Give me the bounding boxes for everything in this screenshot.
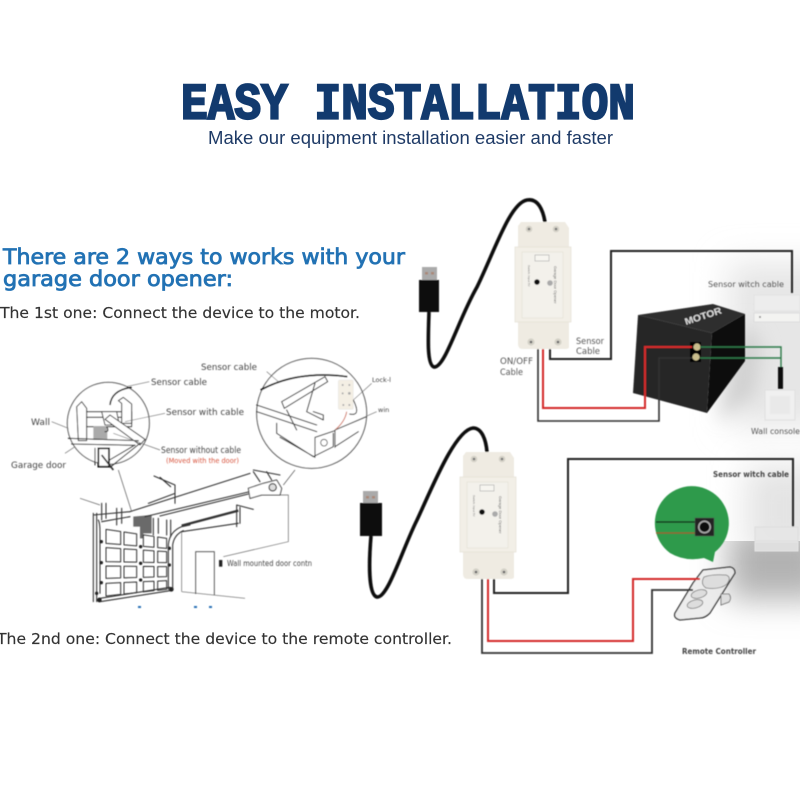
center mechanism — [133, 515, 152, 538]
intro heading: garage door opener: — [3, 267, 233, 291]
device 1: Switch: Input 5V — [527, 265, 531, 287]
intro heading — [2, 245, 405, 291]
door sensor 2 — [755, 527, 798, 551]
USB plug 2 — [360, 491, 382, 536]
labels 2: Remote Controller — [682, 647, 756, 656]
on/off red cable 1 — [543, 347, 692, 408]
device 2: Garage Door Opener — [498, 496, 503, 534]
USB cable 1 — [428, 200, 545, 367]
device 2: Switch: Input 5V — [472, 495, 476, 517]
circle: opener detail — [257, 358, 367, 468]
green wires to wall console — [700, 347, 781, 367]
garage labels — [11, 363, 391, 568]
motor — [633, 304, 745, 413]
cable labels 1 — [500, 280, 800, 436]
grey backdrop: motor wiring — [728, 262, 800, 427]
garage labels: Sensor cable — [151, 378, 207, 388]
device 1 — [515, 222, 571, 349]
garage labels: Wall — [31, 418, 50, 428]
garage door diagram — [11, 358, 391, 608]
sensor cable 2 — [494, 459, 793, 593]
remote control — [675, 567, 735, 620]
wiring diagram: remote connection — [360, 428, 798, 656]
cable labels 1: Cable — [500, 368, 523, 378]
first method text: The 1st one: Connect the device to the motor. — [0, 304, 360, 322]
garage labels: Sensor with cable — [166, 408, 244, 418]
cable labels 1: Cable — [576, 347, 600, 357]
garage door and track — [80, 470, 295, 602]
USB cable 2 — [370, 428, 487, 597]
garage labels: Wall mounted door contn — [227, 559, 312, 568]
grey backdrop: sensor shelf — [745, 465, 800, 555]
USB plug 1 — [419, 267, 439, 312]
garage labels: Garage door — [11, 461, 66, 471]
on/off black cable 2 — [482, 579, 693, 653]
garage labels: (Moved with the door) — [166, 457, 239, 465]
opener — [248, 480, 282, 498]
wiring diagram: motor connection — [419, 200, 800, 436]
door sensor 1 — [754, 295, 800, 322]
cable labels 1: Sensor — [576, 337, 604, 347]
cable labels 1: ON/OFF — [500, 357, 533, 367]
labels 2: Sensor witch cable — [713, 470, 790, 479]
intro heading: There are 2 ways to works with your — [2, 245, 405, 269]
door window grid — [106, 529, 167, 596]
title: EASY INSTALLATION — [181, 78, 635, 134]
garage labels: Sensor without cable — [161, 446, 241, 456]
device 2 — [460, 452, 516, 579]
circle: sensor detail — [67, 382, 149, 470]
cable labels 1: Wall console — [751, 427, 800, 436]
rails and brackets — [130, 473, 250, 517]
labels 2 — [682, 470, 790, 656]
motor: MOTOR — [684, 306, 723, 328]
green sensor callout — [655, 486, 729, 562]
floor marks — [138, 606, 212, 608]
wall console — [765, 367, 795, 420]
garage labels: Lock-l — [372, 376, 391, 384]
second method text: The 2nd one: Connect the device to the remote controller. — [0, 630, 452, 648]
garage labels: win — [378, 406, 389, 414]
leader lines — [52, 372, 377, 453]
garage labels: Sensor cable — [201, 363, 257, 373]
grey backdrop: remote wiring — [728, 525, 800, 600]
subtitle: Make our equipment installation easier and faster — [208, 128, 613, 148]
sensor cable 1 — [550, 251, 792, 359]
device 1: Garage Door Opener — [553, 266, 558, 304]
motor shadow — [718, 320, 762, 420]
door frame — [93, 503, 171, 602]
door hinges — [95, 540, 174, 602]
on/off red cable 2 — [488, 579, 700, 641]
cable labels 1: Sensor witch cable — [708, 280, 784, 289]
on/off black cable 1 — [538, 349, 692, 421]
